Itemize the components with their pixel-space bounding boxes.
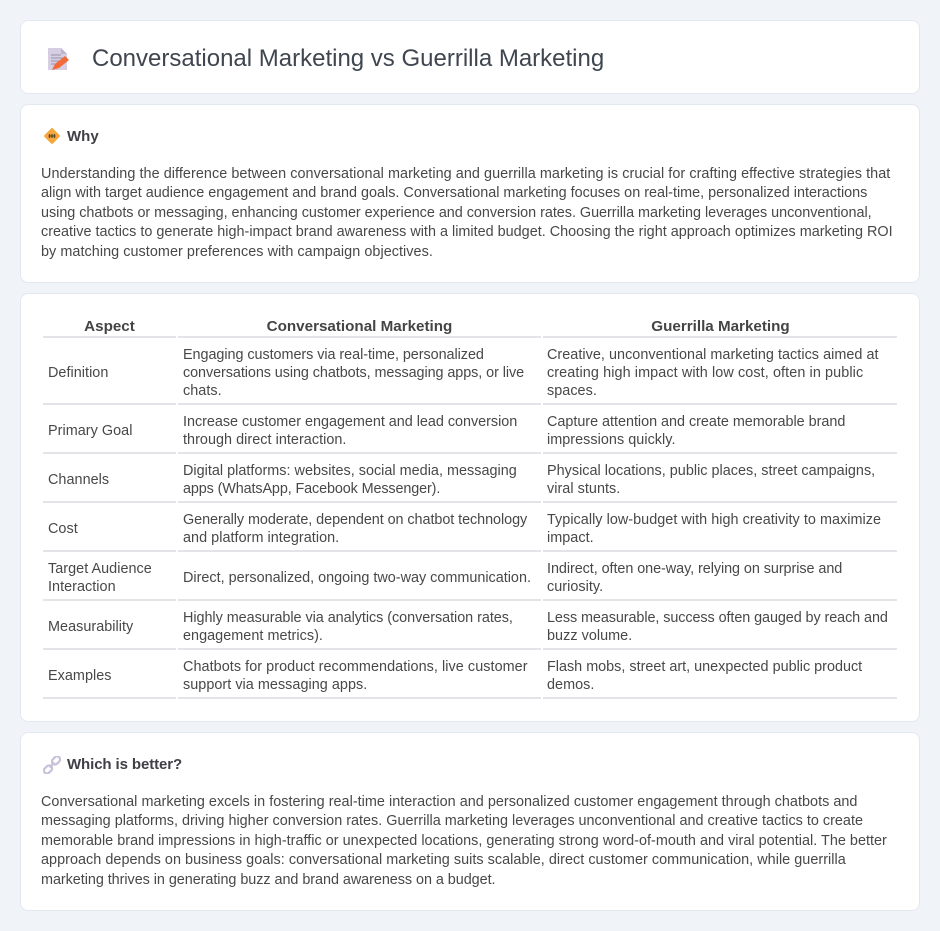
row: channels: viral stunts. bbox=[547, 481, 620, 497]
row: target audience interaction: curiosity. bbox=[547, 579, 603, 595]
icon: warning diamond bbox=[44, 128, 60, 144]
row: examples: support via messaging apps. bbox=[183, 677, 367, 693]
text block: why: creative tactics to generate high-impact brand awareness with a limited budget. Choosing the right approach optimizes marketing ROI bbox=[41, 224, 893, 240]
row: target audience interaction bbox=[43, 561, 897, 601]
row: primary goal bbox=[43, 414, 897, 454]
table header: Conversational Marketing bbox=[267, 318, 452, 335]
row: cost: Cost bbox=[48, 521, 78, 537]
text block: why: by matching customer preferences with campaign objectives. bbox=[41, 244, 433, 260]
panel: why bbox=[20, 104, 920, 283]
row: channels: Channels bbox=[48, 472, 109, 488]
row: definition: Definition bbox=[48, 365, 108, 381]
row: definition: Engaging customers via real-time, personalized bbox=[183, 347, 484, 363]
row: definition bbox=[43, 347, 897, 405]
text block: which is better: messaging platforms, driving higher conversion rates. Guerrilla marketing leverages unconventional and creative tactics to create bbox=[41, 813, 863, 829]
text block: which is better: approach depends on business goals: conversational marketing suits scalable, direct customer communication, while guerrilla bbox=[41, 852, 846, 868]
title: Conversational Marketing vs Guerrilla Marketing bbox=[92, 45, 604, 72]
row: examples: Chatbots for product recommendations, live customer bbox=[183, 659, 528, 675]
row: cost: impact. bbox=[547, 530, 594, 546]
text block: why: align with target audience engagement and brand goals. Conversational marketing focuses on real-time, personalized interactions bbox=[41, 185, 867, 201]
row: primary goal: impressions quickly. bbox=[547, 432, 676, 448]
row: channels: apps (WhatsApp, Facebook Messenger). bbox=[183, 481, 440, 497]
row: definition: conversations using chatbots, messaging apps, or live bbox=[183, 365, 524, 381]
heading: why: Why bbox=[67, 128, 99, 145]
row: examples: Flash mobs, street art, unexpected public product bbox=[547, 659, 862, 675]
row: measurability: engagement metrics). bbox=[183, 628, 323, 644]
heading: which is better: Which is better? bbox=[67, 756, 182, 773]
text block: why: using chatbots or messaging, enhancing customer experience and conversion rates. Guerrilla marketing leverages unconventional, bbox=[41, 205, 872, 221]
row: definition: creating high impact with low cost, often in public bbox=[547, 365, 863, 381]
icon: document with pencil bbox=[48, 48, 69, 70]
row: definition: Creative, unconventional marketing tactics aimed at bbox=[547, 347, 879, 363]
row: target audience interaction: Target Audience bbox=[48, 561, 152, 577]
row: primary goal: through direct interaction. bbox=[183, 432, 346, 448]
row: channels: Physical locations, public places, street campaigns, bbox=[547, 463, 875, 479]
row: examples: Examples bbox=[48, 668, 112, 684]
row: channels bbox=[43, 463, 897, 503]
row: measurability: Less measurable, success often gauged by reach and bbox=[547, 610, 888, 626]
text block: why bbox=[41, 166, 893, 260]
row: measurability: buzz volume. bbox=[547, 628, 632, 644]
row: measurability: Highly measurable via analytics (conversation rates, bbox=[183, 610, 513, 626]
row: examples: demos. bbox=[547, 677, 594, 693]
text block: which is better: Conversational marketing excels in fostering real-time interaction and personalized customer engagement through chatbots and bbox=[41, 794, 857, 810]
row: measurability: Measurability bbox=[48, 619, 133, 635]
row: cost: Generally moderate, dependent on chatbot technology bbox=[183, 512, 527, 528]
row: cost: Typically low-budget with high creativity to maximize bbox=[547, 512, 881, 528]
row: definition: chats. bbox=[183, 383, 222, 399]
row: examples bbox=[43, 659, 897, 699]
text block: why: Understanding the difference between conversational marketing and guerrilla marketing is crucial for crafting effective strategies that bbox=[41, 166, 890, 182]
row: cost bbox=[43, 512, 897, 552]
row: primary goal: Capture attention and create memorable brand bbox=[547, 414, 845, 430]
text block: which is better: marketing thrives in generating buzz and brand awareness on a budget. bbox=[41, 872, 496, 888]
row: target audience interaction: Interaction bbox=[48, 579, 116, 595]
table header: Aspect bbox=[84, 318, 135, 335]
text block: which is better bbox=[41, 794, 887, 888]
panel: which is better bbox=[20, 732, 920, 911]
row: cost: and platform integration. bbox=[183, 530, 339, 546]
row: primary goal: Primary Goal bbox=[48, 423, 132, 439]
icon: link bbox=[43, 756, 61, 774]
row: channels: Digital platforms: websites, social media, messaging bbox=[183, 463, 517, 479]
row: primary goal: Increase customer engagement and lead conversion bbox=[183, 414, 517, 430]
panel: header bbox=[20, 20, 920, 94]
table header: Guerrilla Marketing bbox=[651, 318, 790, 335]
row: target audience interaction: Indirect, often one-way, relying on surprise and bbox=[547, 561, 842, 577]
row: target audience interaction: Direct, personalized, ongoing two-way communication. bbox=[183, 570, 531, 586]
row: definition: spaces. bbox=[547, 383, 597, 399]
table header bbox=[43, 318, 897, 338]
panel: comparison table bbox=[20, 293, 920, 722]
text block: which is better: memorable brand impressions in high-traffic or unexpected locations, generating strong word-of-mouth and viral potential. The better bbox=[41, 833, 887, 849]
row: measurability bbox=[43, 610, 897, 650]
